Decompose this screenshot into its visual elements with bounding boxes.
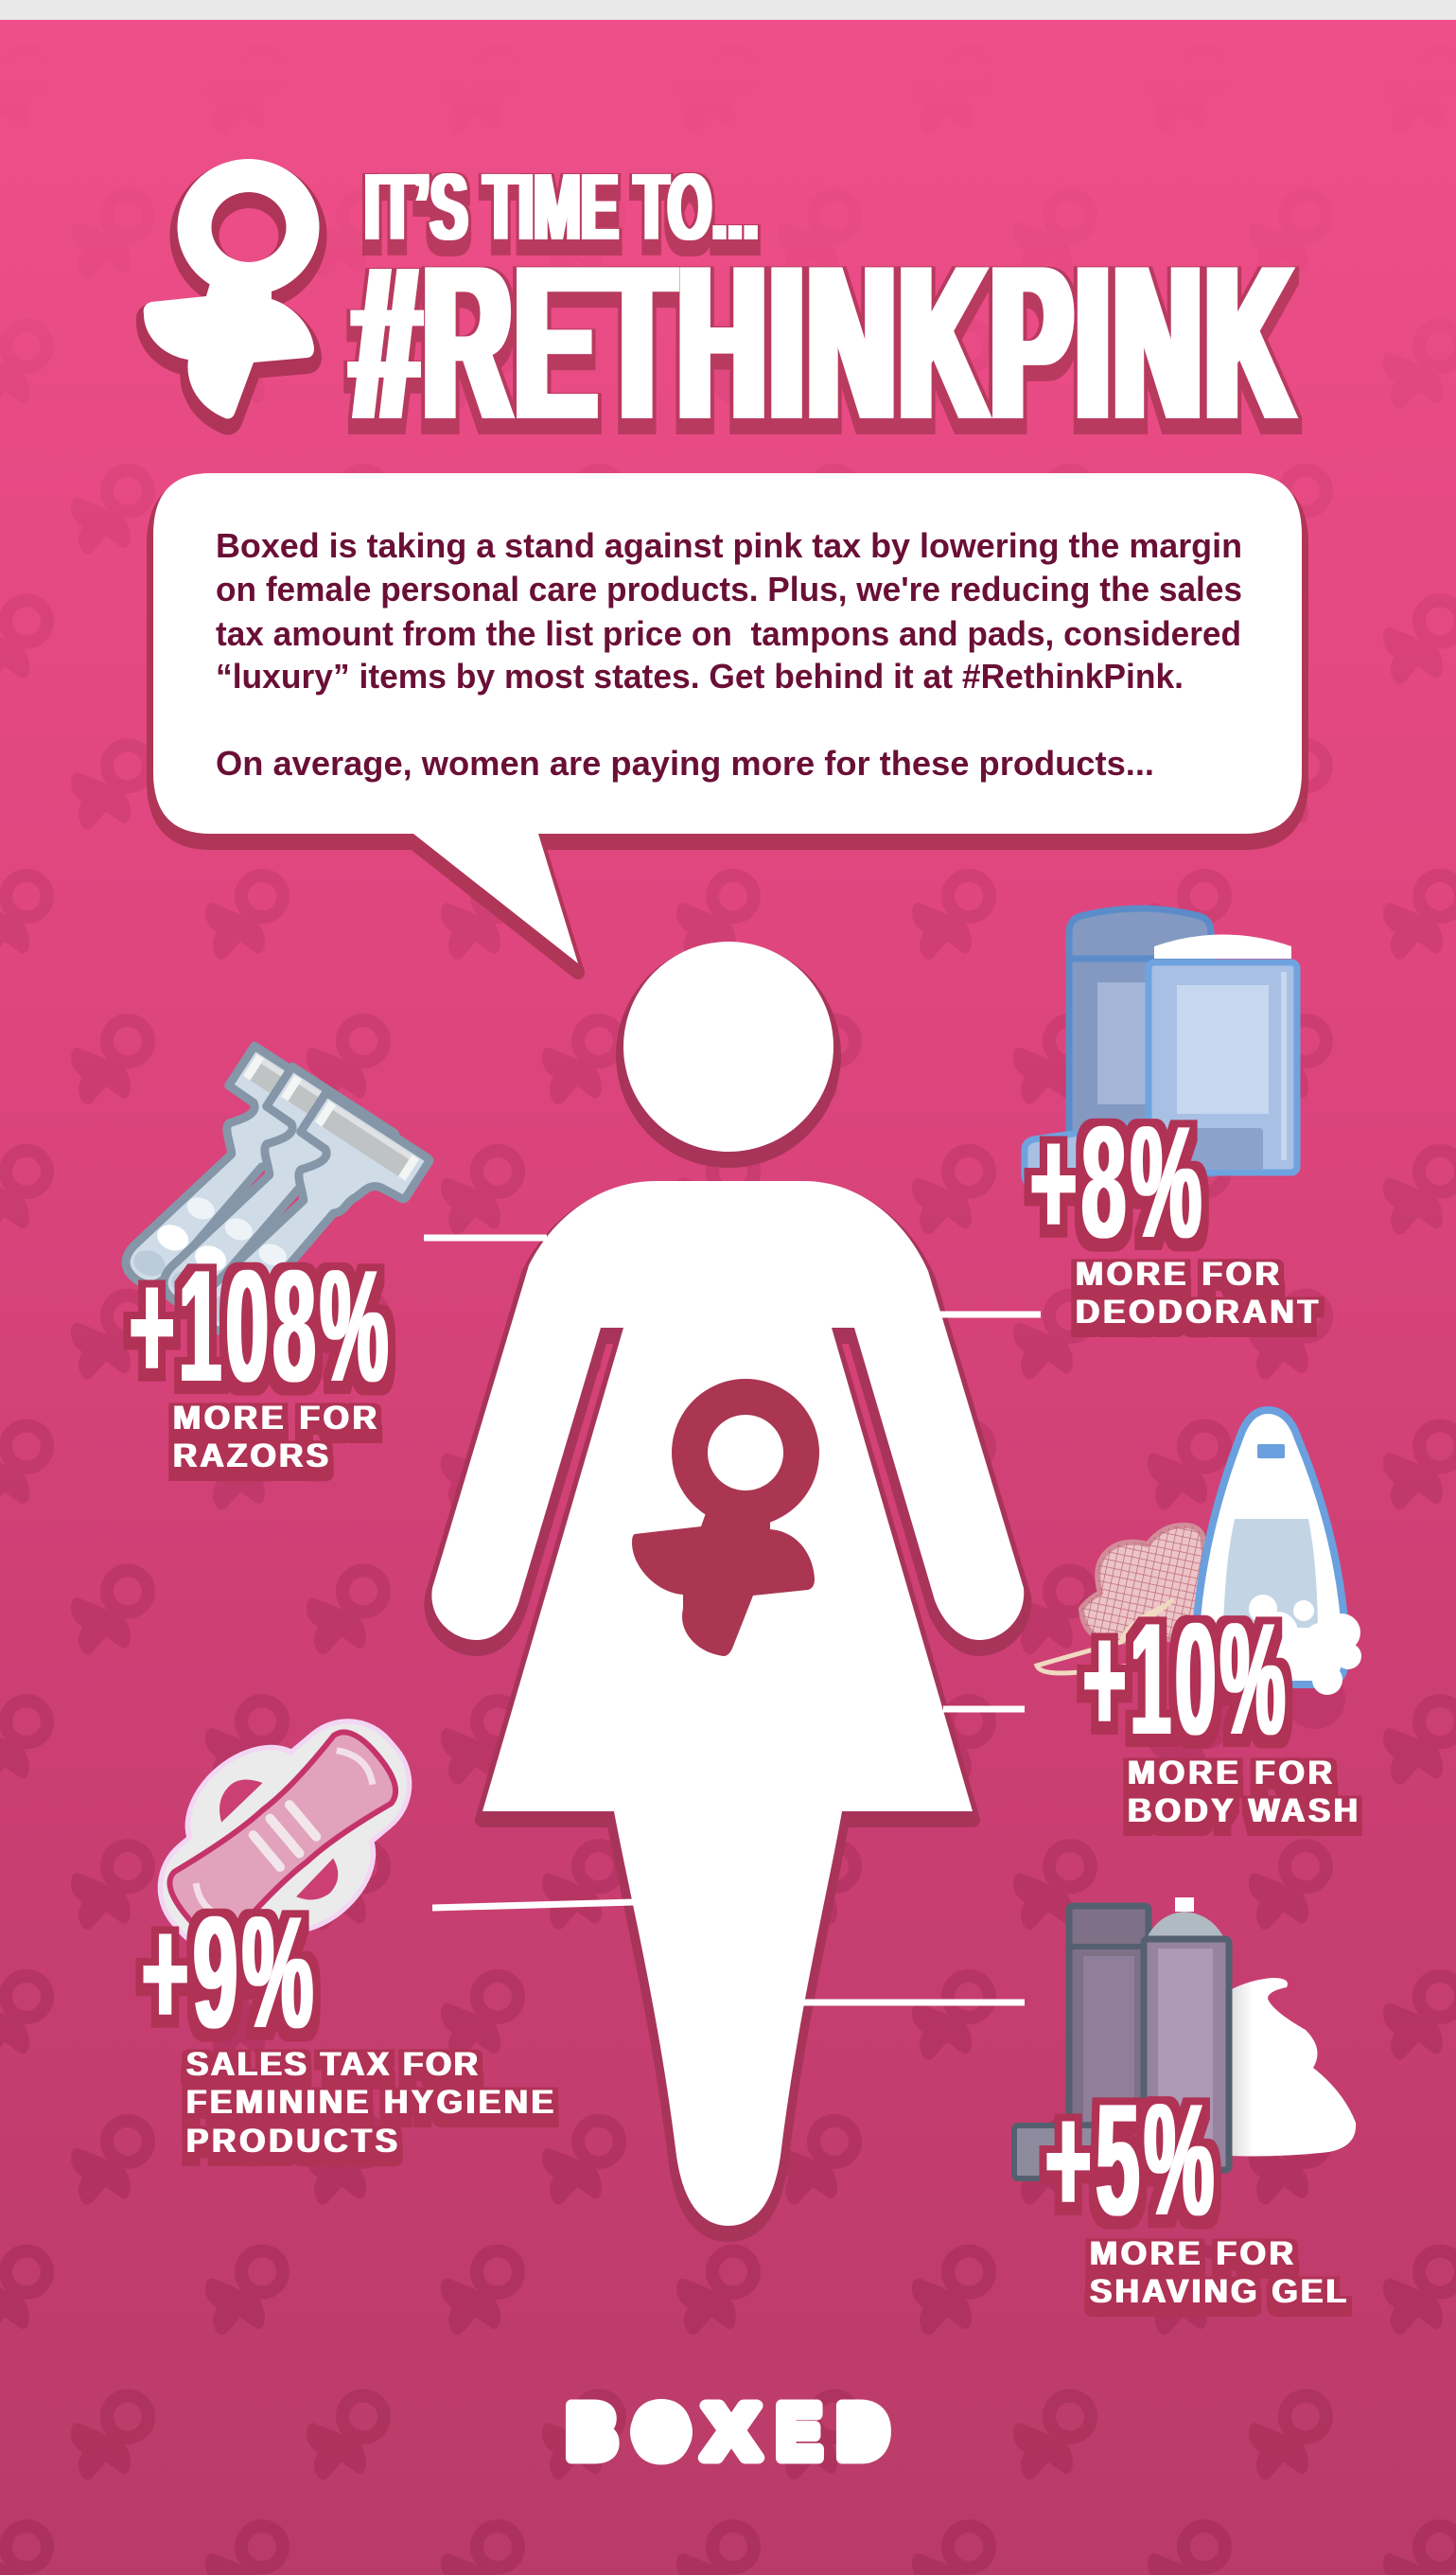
stat: shaving gel: MORE FOR — [1090, 2235, 1293, 2272]
heading: it's time to: IT’S TIME TO... — [364, 154, 759, 260]
stat: shaving gel: SHAVING GEL — [1090, 2273, 1346, 2310]
icon: center pacifier — [632, 1379, 819, 1656]
stat: deodorant: DEODORANT — [1076, 1294, 1318, 1331]
connector lines — [424, 1238, 1041, 2002]
stat: body wash — [1083, 1590, 1358, 1829]
text block: intro copy: On average, women are paying more for these products... — [216, 744, 1154, 783]
page top strip — [0, 0, 1456, 20]
panel: speech bubble — [153, 473, 1302, 973]
icon: header pacifier — [144, 159, 320, 427]
stat: razors — [130, 1237, 393, 1474]
stat: body wash: MORE FOR — [1128, 1755, 1332, 1791]
icon: loofah — [1037, 1526, 1211, 1673]
stat: razors: RAZORS — [173, 1437, 328, 1474]
stat: razors: MORE FOR — [173, 1400, 377, 1437]
icon: deodorant — [1025, 908, 1297, 1194]
stat: sales tax: PRODUCTS — [186, 2123, 397, 2160]
icon: sanitary pad — [113, 1669, 457, 2002]
figure: woman silhouette — [431, 942, 1024, 2234]
logo: boxed: E — [777, 2390, 821, 2474]
stat: sales tax: FEMININE HYGIENE — [186, 2084, 553, 2121]
logo: boxed: B — [567, 2390, 617, 2474]
text block: intro copy — [216, 526, 1242, 783]
text block: intro copy: tax amount from the list price on tampons and pads, considered — [216, 614, 1241, 653]
text: +108% — [130, 1237, 393, 1415]
stat: deodorant — [1030, 1093, 1318, 1331]
stat: sales tax — [142, 1883, 553, 2160]
icon: shaving gel — [1014, 1897, 1356, 2178]
stat: deodorant: MORE FOR — [1076, 1256, 1279, 1293]
logo: boxed: O — [634, 2390, 689, 2474]
bubbles — [1249, 1595, 1361, 1695]
stat: sales tax: SALES TAX FOR — [186, 2046, 478, 2083]
text block: intro copy: on female personal care products. Plus, we're reducing the sales — [216, 570, 1242, 608]
stat: shaving gel: +5% — [1045, 2071, 1219, 2249]
stat: body wash: BODY WASH — [1128, 1792, 1358, 1829]
icon: body wash bottle — [1195, 1410, 1361, 1729]
logo: boxed: D — [837, 2390, 888, 2474]
icon: razors — [113, 1046, 430, 1378]
stat: shaving gel — [1045, 2071, 1346, 2310]
stat: deodorant: +8% — [1030, 1093, 1206, 1271]
text block: intro copy: “luxury” items by most states. Get behind it at #RethinkPink. — [216, 657, 1184, 696]
text block: intro copy: Boxed is taking a stand against pink tax by lowering the margin — [216, 526, 1242, 565]
logo: boxed: X — [704, 2390, 759, 2474]
stat: sales tax: +9% — [142, 1883, 318, 2061]
logo: boxed — [567, 2390, 888, 2474]
